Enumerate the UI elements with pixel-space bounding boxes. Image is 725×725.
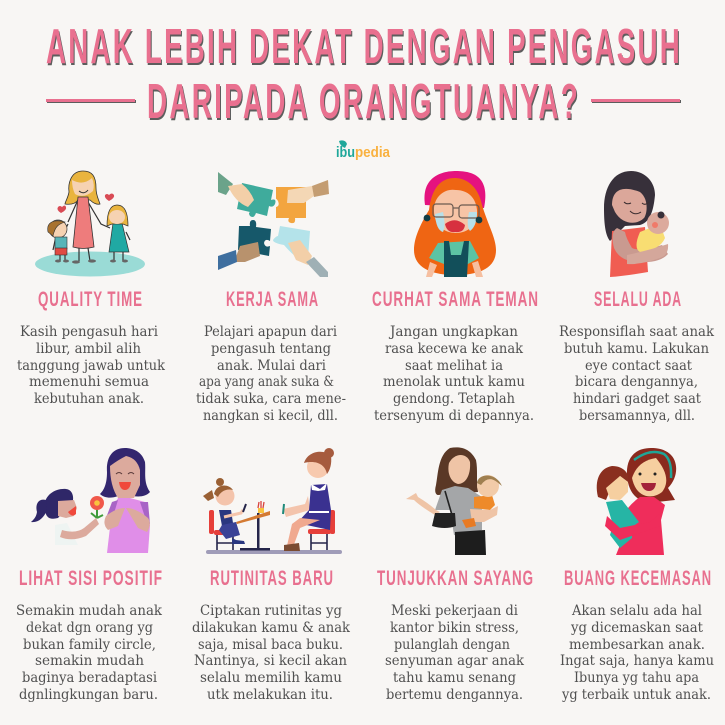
panel: quality time (17, 171, 165, 407)
text block (385, 603, 524, 703)
text block: yg dicemaskan saat (570, 620, 703, 636)
text block: utk melakukan itu. (207, 687, 333, 703)
text block: Jangan ungkapkan (388, 324, 518, 340)
text block: yg terbaik untuk anak. (561, 687, 711, 703)
text block: tersenyum di depannya. (374, 408, 534, 424)
text block: Ingat saja, hanya kamu (560, 653, 714, 669)
text block: anak. Mulai dari (217, 358, 326, 374)
icon: mother and two children (35, 171, 145, 276)
text block: baginya beradaptasi (22, 670, 157, 686)
heading: QUALITY TIME (38, 287, 143, 311)
text block (16, 603, 162, 703)
text block: pengasuh tentang (211, 341, 331, 357)
panel: kerja sama (196, 172, 346, 424)
text block: Semakin mudah anak (16, 603, 162, 619)
heading: LIHAT SISI POSITIF (19, 566, 163, 590)
text block: Ibunya yg tahu apa (574, 670, 699, 686)
icon: teacher and child at desk (203, 448, 342, 554)
text block (374, 324, 534, 424)
heading: KERJA SAMA (226, 287, 319, 311)
text block: hindari gadget saat (573, 391, 701, 407)
text block: eye contact saat (585, 358, 692, 374)
heading: RUTINITAS BARU (210, 566, 334, 590)
panel: tunjukkan sayang (377, 447, 534, 703)
text block: dilakukan kamu & anak (192, 620, 350, 636)
panel: curhat sama teman (372, 171, 539, 424)
text block: tidak suka, cara mene- (196, 391, 346, 407)
text block: menolak untuk kamu (383, 374, 525, 390)
text block (192, 603, 350, 703)
panel: buang kecemasan (560, 448, 714, 703)
text block: Meski pekerjaan di (391, 603, 518, 619)
text block: bicara dengannya, (575, 374, 698, 390)
text block: Responsiflah saat anak (559, 324, 714, 340)
text block (560, 603, 714, 703)
text block: saat melihat ia (405, 358, 503, 374)
panel: lihat sisi positif (16, 448, 163, 703)
text block: dgnlingkungan baru. (19, 687, 158, 703)
text block: pulanglah dengan (394, 637, 510, 653)
text block: semakin mudah (35, 653, 144, 669)
text block: kantor bikin stress, (390, 620, 519, 636)
text block: libur, ambil alih (36, 341, 141, 357)
text block: Kasih pengasuh hari (20, 324, 158, 340)
logo: ibupedia: ibu (336, 144, 355, 161)
text block: Pelajari apapun dari (204, 324, 337, 340)
text block: apa yang anak suka & (199, 374, 334, 390)
text block: butuh kamu. Lakukan (564, 341, 709, 357)
icon: girl giving flower to mother (31, 448, 150, 553)
text block: nangkan si kecil, dll. (203, 408, 338, 424)
logo: ibupedia: pedia (355, 144, 391, 161)
text block: membesarkan anak. (569, 637, 705, 653)
text block: Akan selalu ada hal (571, 603, 702, 619)
text block: memenuhi semua (29, 374, 149, 390)
icon: mother hugging child (597, 448, 676, 555)
text block: selalu memilih kamu (200, 670, 342, 686)
text block: Nantinya, si kecil akan (194, 653, 347, 669)
text block (559, 324, 714, 424)
icon: hands with puzzle pieces (218, 172, 329, 277)
text block: bukan family circle, (23, 637, 156, 653)
text block: gendong. Tetaplah (393, 391, 515, 407)
text block: senyuman agar anak (385, 653, 524, 669)
text block: bersamannya, dll. (579, 408, 695, 424)
text block: saja, misal baca buku. (198, 637, 343, 653)
panel: rutinitas baru (192, 448, 350, 703)
text block: rasa kecewa ke anak (385, 341, 523, 357)
text block: Ciptakan rutinitas yg (200, 603, 342, 619)
text block: tanggung jawab untuk (17, 358, 165, 374)
panel: selalu ada (559, 171, 714, 424)
logo: ibupedia (336, 140, 391, 161)
icon: mother carrying baby (406, 447, 502, 555)
text block (17, 324, 165, 407)
text block: kebutuhan anak. (34, 391, 144, 407)
text block (196, 324, 346, 424)
heading: TUNJUKKAN SAYANG (377, 566, 534, 590)
title (46, 20, 682, 129)
text block: tahu kamu senang (393, 670, 516, 686)
text block: dekat dgn orang yg (26, 620, 153, 636)
heading: CURHAT SAMA TEMAN (372, 287, 539, 311)
icon: mother holding baby (604, 171, 669, 277)
icon: crying woman (414, 171, 496, 277)
text block: bertemu dengannya. (386, 687, 523, 703)
